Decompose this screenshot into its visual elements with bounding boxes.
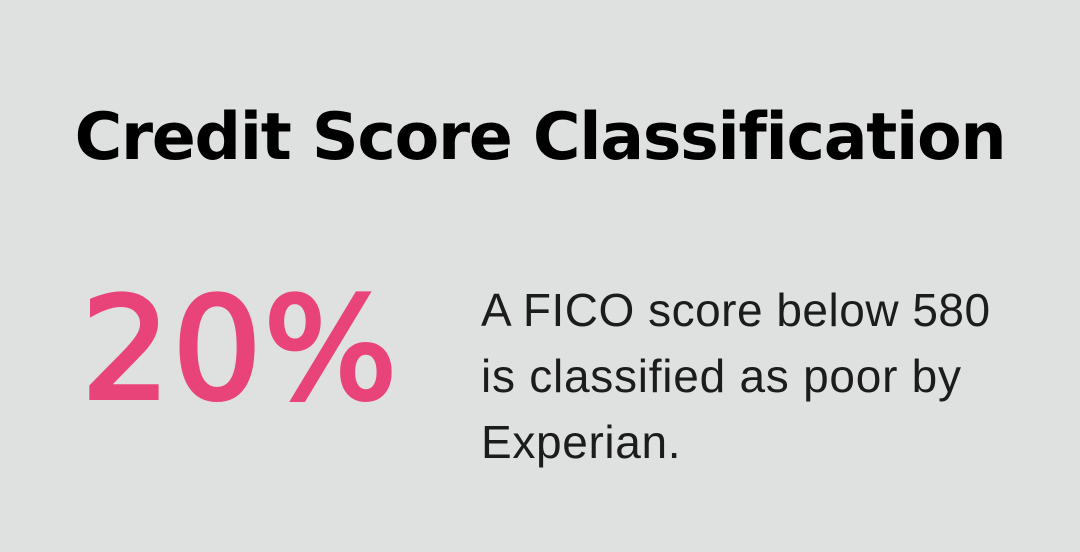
title: Credit Score Classification (75, 100, 1005, 175)
description text: A FICO score below 580 (481, 284, 991, 336)
description text: Experian. (481, 416, 681, 468)
description text: is classified as poor by (481, 350, 962, 402)
big statistic: 20% (81, 268, 399, 432)
description text (481, 284, 991, 468)
